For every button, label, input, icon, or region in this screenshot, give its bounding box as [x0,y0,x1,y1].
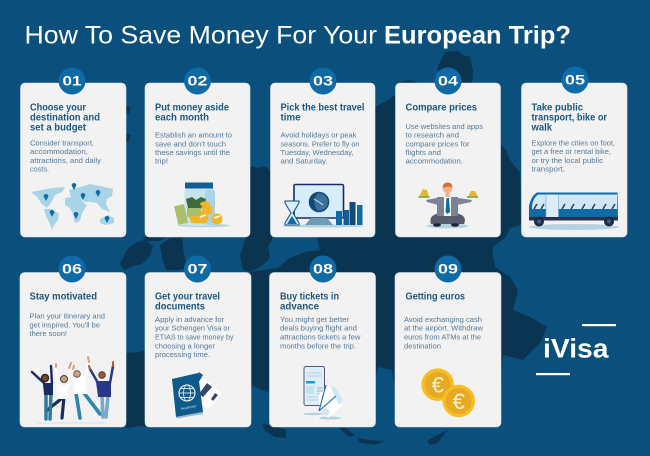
text 06: there soon! [30,329,67,338]
card 07: travel documents [145,256,251,427]
icon: passport and tickets: PASSPORT [180,404,197,411]
icon: phone and plane tickets [303,366,343,420]
text 07: your Schengen Visa or [155,324,230,332]
badge 05 [562,66,588,94]
text 05: or try the local public [532,156,603,165]
icon: euro coins [421,368,475,417]
text 08: You might get better [280,315,349,324]
text 04: flights and [406,148,441,157]
text 09: destination [404,342,441,350]
heading 08 [280,292,339,312]
text 02: save and don't touch [155,140,226,148]
badge 04: 04 [438,74,459,89]
icon: savings jar [174,182,230,227]
heading 02: each month [155,112,209,124]
card 01: destination and budget [20,68,126,237]
text 09: Avoid exchanging cash [404,315,482,324]
text 04: compare prices for [406,140,470,148]
badge 08: 08 [313,262,334,277]
text 08: months before the trip. [280,342,356,350]
badge 01 [58,68,86,94]
text 05: get a free or rental bike, [532,147,611,156]
text 07: Apply in advance for [155,315,224,324]
text 07: choosing a longer [155,342,215,350]
badge 09 [434,256,462,282]
text 01: attractions, and daily [30,156,101,165]
text 04: accommodation. [406,156,463,166]
text 07 [155,315,234,359]
text 07: processing time. [155,350,210,359]
heading 07: documents [155,302,205,312]
badge 08 [310,256,336,282]
text 02: these savings until the [155,148,230,157]
card 02: put money aside [145,68,250,237]
badge 03: 03 [313,74,334,89]
icon: passport and tickets [172,372,222,418]
icon: world map with pins [31,183,114,230]
text 02 [155,130,232,166]
iVisa logo [536,324,616,375]
text 09: at the airport. Withdraw [404,324,483,332]
card 03: best travel time [270,68,375,237]
heading 03 [280,102,365,124]
icon: monitor, clock and hourglass [282,184,364,228]
text 05: Explore the cities on foot, [532,138,615,148]
text 08 [280,315,361,350]
title [24,22,571,50]
heading 07: Get your travel [155,292,220,302]
icon: meditating businessman with money [418,182,478,228]
badge 02 [184,68,211,94]
badge 05: 05 [565,73,586,88]
text 08: attractions tickets a few [280,332,361,342]
heading 07 [155,292,220,312]
badge 04 [434,68,462,94]
title: European Trip? [384,22,571,50]
card 08: buy tickets in advance [270,256,376,427]
badge 07: 07 [188,262,208,277]
heading 02 [155,102,229,124]
heading 01: set a budget [30,122,86,134]
heading 04: Compare prices [406,102,477,114]
card 05: public transport [522,66,627,237]
heading 05 [531,102,607,134]
heading 01 [30,102,100,134]
icon: euro coins: € [432,372,444,398]
text 03: seasons. Prefer to fly on [280,140,360,148]
badge 06: 06 [62,262,83,277]
text 06 [30,312,105,338]
text 04: Use websites and apps [406,122,483,131]
badge 03 [310,68,336,94]
heading 03: Pick the best travel [280,102,365,114]
heading 06: Stay motivated [30,292,97,302]
text 01 [30,138,101,174]
heading 05: walk [531,122,552,134]
text 01: Consider transport, [30,138,94,148]
heading 01: destination and [30,112,100,124]
heading 03: time [280,112,301,124]
badge 01: 01 [62,74,82,89]
heading 08: advance [280,302,319,312]
badge 06 [58,256,86,282]
text 03: Tuesday, Wednesday, [280,148,354,157]
text 06: get inspired. You'll be [30,320,100,330]
badge 09: 09 [438,262,458,277]
text 04 [406,122,483,166]
illustration: four cheering friends [32,357,113,423]
text 09 [404,315,483,350]
card 09: getting euros [395,256,501,427]
icon: bus [529,192,619,230]
text 05 [532,138,615,174]
icon: euro coins: € [453,389,465,414]
badge 07 [184,256,211,282]
heading 09: Getting euros [406,292,465,302]
text 06: Plan your itinerary and [30,312,105,320]
text 03: and Saturday. [280,156,328,166]
text 05: transport. [532,164,565,174]
text 03: Avoid holidays or peak [280,130,357,140]
text 02: trip! [155,156,168,166]
card 04: compare prices [396,68,500,237]
heading 05: transport, bike or [532,112,607,124]
text 08: deals buying flight and [280,324,357,332]
heading 08: Buy tickets in [280,292,339,302]
text 09: euros from ATMs at the [404,332,481,342]
title: How To Save Money For Your [24,22,377,50]
card 06: stay motivated [20,256,126,427]
background map of Europe [120,51,547,445]
iVisa logo: iVisa [543,334,610,364]
text 01: accommodation, [30,147,88,156]
text 01: costs. [30,164,49,174]
text 02: Establish an amount to [155,130,232,140]
heading 05: Take public [532,102,583,114]
badge 02: 02 [188,74,208,89]
heading 01: Choose your [30,102,86,114]
text 03 [280,130,360,166]
text 04: to research and [406,130,459,140]
heading 02: Put money aside [155,102,229,114]
text 07: ETIAS to save money by [155,332,234,342]
